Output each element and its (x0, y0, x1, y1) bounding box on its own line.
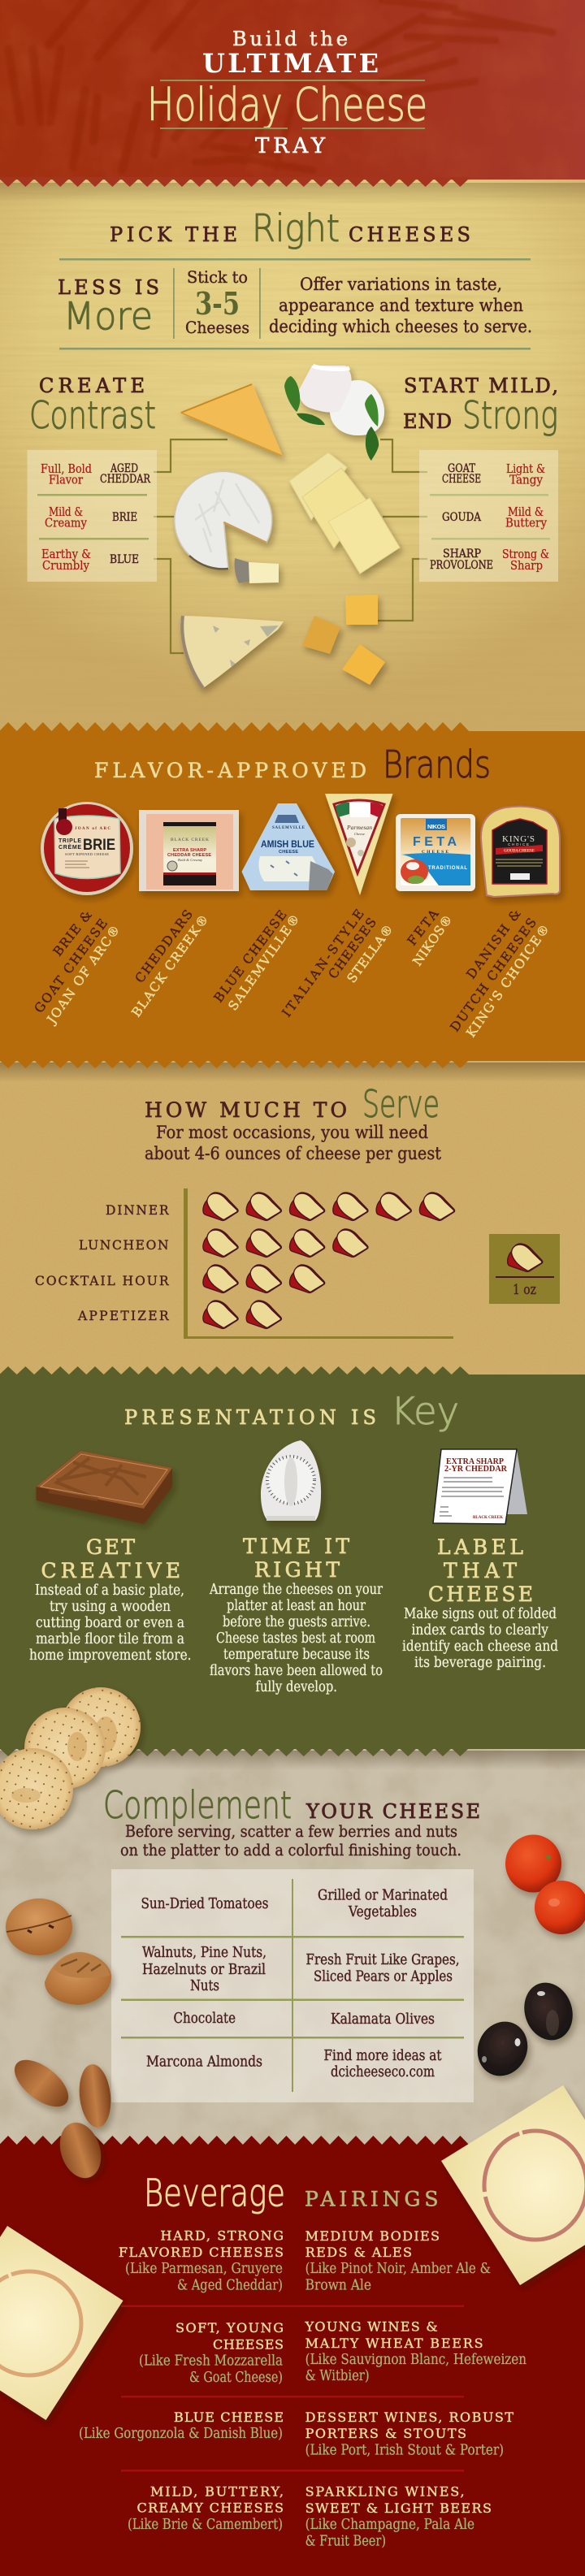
complement table: Sun-Dried Tomatoes (141, 1896, 269, 1912)
product: salemville amish blue (242, 803, 335, 890)
serving advice (145, 1123, 442, 1163)
product: king's choice gouda: KING'S (502, 834, 535, 844)
icon: folded label card: BLACK CREEK (473, 1516, 503, 1520)
tip: time it right: fully develop. (255, 1679, 337, 1695)
heading: FLAVOR-APPROVED (94, 759, 366, 782)
panel: contrast table: BRIE (112, 511, 137, 524)
product: joan of arc brie: SOFT RIPENED CHEESE (65, 852, 109, 856)
icon: folded label card: EXTRA SHARP (446, 1457, 504, 1466)
start mild end strong heading: END (403, 410, 452, 433)
label: cheddars, black creek: CHEDDARS (132, 907, 196, 985)
pairing row 4: (Like Brie & Camembert) (128, 2517, 283, 2533)
label: brie and goat cheese, joan of arc: GOAT CHEESE (32, 916, 110, 1015)
heading (94, 742, 491, 786)
pairing row 3: (Like Gorgonzola & Danish Blue) (79, 2426, 283, 2442)
product: joan of arc brie: BRIE (83, 837, 115, 854)
illustration: aged cheddar wedge (181, 384, 282, 456)
tip: label that cheese: Make signs out of folded (404, 1606, 557, 1622)
product: stella parmesan: Parmesan (346, 824, 372, 831)
label: italian-style cheeses, stella: CHEESES (326, 916, 379, 981)
panel: contrast table: AGED (110, 462, 138, 475)
tip: label that cheese: its beverage pairing. (414, 1655, 546, 1671)
tip: get creative: Instead of a basic plate, (35, 1582, 184, 1599)
complement table: Nuts (190, 1978, 219, 1994)
product: salemville amish blue: AMISH BLUE (261, 838, 314, 850)
title: Holiday Cheese (147, 79, 427, 132)
pairing row 3: (Like Port, Irish Stout & Porter) (306, 2442, 504, 2458)
icon: kitchen timer (261, 1440, 321, 1521)
heading: Brands (383, 742, 491, 786)
tip: time it right: platter at least an hour (227, 1598, 366, 1614)
complement advice: on the platter to add a colorful finishing touch. (120, 1840, 462, 1859)
panel: flavor-approved brands (32, 742, 560, 1040)
tip: time it right: Cheese tastes best at room (216, 1630, 375, 1647)
panel: contrast table: Crumbly (42, 560, 90, 573)
panel: mild to strong table: Sharp (510, 560, 543, 573)
heading: PAIRINGS (305, 2187, 439, 2211)
pictogram chart (35, 1188, 455, 1339)
pairing row 2: YOUNG WINES & (305, 2318, 438, 2335)
label: italian-style cheeses, stella: ITALIAN-STYLE (280, 907, 367, 1020)
row: dinner (106, 1193, 455, 1220)
pairing row 1 (119, 2227, 491, 2294)
pairing row 1: REDS & ALES (306, 2245, 412, 2260)
legend: 1 oz (489, 1234, 560, 1304)
pairing row 1: FLAVORED CHEESES (119, 2245, 284, 2260)
product: nikos feta: CHEESE (422, 850, 448, 855)
complement table: Fresh Fruit Like Grapes, (306, 1952, 460, 1968)
complement table: Sliced Pears or Apples (314, 1969, 453, 1985)
heading: YOUR CHEESE (306, 1800, 480, 1823)
label: danish and dutch cheeses, king's choice: DANISH & (464, 907, 524, 981)
pairing row 3 (79, 2409, 514, 2458)
tip: get creative: GET (86, 1535, 135, 1559)
heading (110, 206, 470, 250)
tip: time it right: temperature because its (223, 1647, 370, 1663)
product: black creek cheddar: Bold & Creamy (178, 858, 202, 862)
pairing row 4: & Fruit Beer) (306, 2533, 386, 2549)
row: dinner: DINNER (106, 1203, 170, 1218)
complement table: dcicheeseco.com (331, 2064, 435, 2080)
complement table (111, 1869, 474, 2102)
illustration: gouda slices (289, 452, 400, 574)
title: Build the (232, 28, 348, 50)
tip: label that cheese: CHEESE (428, 1582, 533, 1606)
product: nikos feta: TRADITIONAL (428, 866, 467, 871)
row: appetizer: APPETIZER (77, 1309, 170, 1323)
product: stella parmesan: Cheese (354, 832, 365, 836)
tip: time it right: flavors have been allowed to (210, 1663, 383, 1679)
heading: PICK THE (110, 223, 237, 246)
row: cocktail hour (35, 1265, 325, 1292)
heading: Complement (103, 1783, 292, 1827)
heading: HOW MUCH TO (145, 1098, 347, 1122)
label: blue cheese, salemville: SALEMVILLE® (226, 911, 303, 1013)
panel: mild to strong table: PROVOLONE (430, 559, 493, 572)
create contrast heading (29, 374, 156, 437)
product: black creek cheddar: CHEDDAR CHEESE (167, 853, 211, 858)
tip: time it right: Arrange the cheeses on your (209, 1582, 384, 1598)
start mild end strong heading: START MILD, (404, 374, 558, 397)
title: TRAY (255, 134, 326, 158)
product: king's choice gouda (481, 807, 560, 897)
row: appetizer (77, 1301, 281, 1328)
pairing row 2: SOFT, YOUNG (176, 2320, 284, 2336)
panel: mild to strong table: Mild & (508, 506, 544, 519)
label: blue cheese, salemville: BLUE CHEESE (211, 907, 290, 1005)
less is more: LESS IS (58, 276, 159, 299)
pairing row 2: & Witbier) (306, 2368, 370, 2384)
serving advice: For most occasions, you will need (156, 1123, 428, 1142)
heading (124, 1389, 459, 1433)
panel: pick the right cheeses (28, 206, 558, 688)
pairing row 1: Brown Ale (306, 2278, 371, 2294)
pairing row 2: & Goat Cheese) (189, 2370, 283, 2386)
tip: label that cheese: LABEL (437, 1535, 523, 1559)
heading (144, 2171, 439, 2214)
pairing row 2: (Like Fresh Mozzarella (139, 2353, 283, 2369)
create contrast heading: Contrast (29, 393, 156, 437)
almond on border (53, 2117, 108, 2184)
create contrast heading: CREATE (39, 374, 145, 397)
tip: label that cheese: THAT (444, 1559, 517, 1582)
complement advice: Before serving, scatter a few berries and nuts (125, 1821, 457, 1841)
heading: Serve (362, 1082, 440, 1126)
panel: presentation is key (29, 1389, 558, 1695)
napkin with wine ring, right (441, 2085, 585, 2285)
heading: Key (391, 1389, 459, 1433)
illustration: olives (469, 1976, 580, 2084)
complement table: Chocolate (174, 2011, 236, 2027)
product: king's choice gouda: CHOICE (508, 842, 529, 846)
label: feta, nikos: FETA (405, 907, 442, 948)
product: joan of arc brie: JOAN of ARC (75, 827, 110, 831)
panel: contrast table: Full, Bold (41, 463, 92, 476)
pairing row 3: BLUE CHEESE (174, 2409, 284, 2425)
connector lines (154, 439, 427, 653)
icon: cutting board (36, 1451, 172, 1524)
panel: mild to strong table: SHARP (443, 548, 481, 561)
panel: mild to strong table: CHEESE (442, 473, 481, 486)
stick to 3-5 cheeses (185, 267, 249, 337)
product: joan of arc brie: TRIPLE (58, 838, 81, 844)
tip: get creative (29, 1535, 192, 1664)
icon: folded label card: 2-YR CHEDDAR (444, 1465, 508, 1474)
product: king's choice gouda: GOUDA CHEESE (504, 850, 535, 853)
pairing row 3: PORTERS & STOUTS (306, 2426, 466, 2441)
illustration: crackers (0, 1687, 141, 1829)
pine frond background (8, 0, 552, 171)
start mild end strong heading: Strong (462, 393, 558, 437)
panel: complement your cheese (0, 1783, 585, 2549)
variation advice (269, 275, 532, 336)
less is more: More (63, 294, 153, 338)
panel: mild to strong table (419, 450, 558, 582)
title: ULTIMATE (202, 48, 379, 79)
illustration: brie wheel (175, 471, 279, 583)
tip: get creative: home improvement store. (29, 1647, 192, 1664)
label: brie and goat cheese, joan of arc: JOAN OF ARC® (43, 923, 123, 1028)
legend: 1 oz: 1 oz (513, 1282, 536, 1298)
tip: time it right: TIME IT (243, 1535, 349, 1558)
heading (103, 1783, 480, 1827)
napkin with beer ring, left (0, 2226, 124, 2420)
pairing row 2 (139, 2318, 526, 2386)
panel: header (8, 0, 552, 171)
tip: label that cheese (402, 1535, 558, 1671)
pairing row 2: CHEESES (213, 2336, 284, 2353)
pairing row 2: MALTY WHEAT BEERS (306, 2336, 483, 2351)
label: danish and dutch cheeses, king's choice: KING'S CHOICE® (464, 922, 552, 1040)
panel: mild to strong table: Strong & (502, 548, 549, 561)
panel: contrast table: Mild & (49, 506, 83, 519)
stick to 3-5 cheeses: Cheeses (185, 318, 249, 337)
product: nikos feta (396, 814, 475, 891)
label: italian-style cheeses, stella: STELLA® (344, 922, 396, 985)
tip: get creative: CREATIVE (41, 1559, 180, 1582)
product: nikos feta: FETA (413, 835, 457, 849)
tip: time it right: before the guests arrive. (223, 1614, 370, 1630)
product: black creek cheddar (139, 810, 239, 891)
row: luncheon: LUNCHEON (79, 1238, 169, 1253)
tip: get creative: cutting board or even a (36, 1615, 184, 1631)
panel: contrast table: BLUE (110, 553, 139, 566)
panel: how much to serve (35, 1082, 560, 1339)
complement table: Find more ideas at (323, 2048, 442, 2064)
product: black creek cheddar: EXTRA SHARP (173, 848, 206, 853)
panel: contrast table: Flavor (49, 474, 83, 487)
row: luncheon (79, 1229, 368, 1257)
complement table: Grilled or Marinated (318, 1888, 448, 1904)
panel: mild to strong table: GOUDA (442, 511, 482, 524)
illustration: walnuts (6, 1898, 111, 2005)
complement table: Marcona Almonds (146, 2054, 262, 2070)
label: feta, nikos: NIKOS® (410, 912, 456, 968)
pairing row 2: (Like Sauvignon Blanc, Hefeweizen (306, 2352, 526, 2368)
complement table: Hazelnuts or Brazil (142, 1962, 266, 1978)
heading: Right (252, 206, 340, 250)
panel: mild to strong table: Tangy (509, 474, 544, 487)
label: danish and dutch cheeses, king's choice: DUTCH CHEESES (448, 916, 540, 1034)
illustration: provolone cubes (302, 595, 385, 685)
panel: contrast table: CHEDDAR (100, 473, 150, 486)
start mild end strong heading (403, 374, 558, 437)
illustration: goat cheese with basil (284, 366, 384, 461)
title (147, 28, 427, 158)
label: cheddars, black creek: BLACK CREEK® (129, 912, 211, 1020)
panel: mild to strong table: Light & (506, 463, 545, 476)
pairing row 4 (128, 2484, 492, 2549)
illustration: tomatoes (505, 1834, 585, 1934)
variation advice: appearance and texture when (279, 296, 523, 315)
stick to 3-5 cheeses: Stick to (187, 267, 248, 287)
product: joan of arc brie: CRÈME (58, 843, 81, 851)
tip: time it right: RIGHT (254, 1558, 340, 1582)
tip: label that cheese: index cards to clearly (411, 1622, 548, 1639)
panel: contrast table: Earthy & (41, 548, 91, 561)
less is more (58, 276, 159, 338)
pairing row 4: MILD, BUTTERY, (150, 2484, 284, 2499)
heading: PRESENTATION IS (124, 1406, 376, 1429)
pairing row 1: (Like Pinot Noir, Amber Ale & (306, 2261, 491, 2277)
complement table: Kalamata Olives (331, 2011, 435, 2028)
serving advice: about 4-6 ounces of cheese per guest (145, 1144, 442, 1163)
heading: Beverage (144, 2171, 285, 2214)
tip: time it right (209, 1535, 384, 1695)
pairing row 1: HARD, STRONG (161, 2227, 284, 2244)
pairing row 4: (Like Champagne, Pala Ale (306, 2517, 474, 2533)
panel: mild to strong table: Buttery (505, 517, 548, 530)
complement table: Vegetables (348, 1904, 417, 1920)
product: stella parmesan (325, 794, 393, 895)
rotated brand labels (32, 907, 552, 1040)
panel: contrast table (28, 450, 157, 582)
variation advice: deciding which cheeses to serve. (269, 317, 532, 336)
pairing row 4: SPARKLING WINES, (306, 2484, 465, 2499)
heading: CHEESES (349, 223, 470, 246)
panel: contrast table: Creamy (45, 517, 88, 530)
stick to 3-5 cheeses: 3-5 (195, 285, 240, 322)
pairing row 1: MEDIUM BODIES (306, 2228, 440, 2244)
illustration: blue cheese wedge (180, 616, 284, 688)
variation advice: Offer variations in taste, (300, 275, 502, 294)
pairing row 1: (Like Parmesan, Gruyere (125, 2261, 283, 2277)
heading (145, 1082, 440, 1126)
tip: label that cheese: identify each cheese and (402, 1639, 558, 1655)
product: nikos feta: NIKOS (427, 823, 445, 830)
panel: mild to strong table: GOAT (448, 462, 476, 475)
panel: beverage pairings (0, 2085, 585, 2549)
pairing row 4: CREAMY CHEESES (136, 2500, 284, 2515)
complement table: Walnuts, Pine Nuts, (142, 1945, 266, 1961)
product: salemville amish blue: SALEMVILLE (272, 826, 306, 830)
label: brie and goat cheese, joan of arc: BRIE & (50, 907, 95, 959)
complement advice (120, 1821, 462, 1859)
icon: folded label card (433, 1449, 527, 1524)
product: joan of arc brie (41, 802, 133, 895)
tip: get creative: marble floor tile from a (36, 1631, 184, 1647)
row: cocktail hour: COCKTAIL HOUR (35, 1274, 170, 1288)
illustration: almonds (6, 2051, 114, 2129)
product: salemville amish blue: CHEESE (279, 850, 298, 855)
product: black creek cheddar: BLACK CREEK (171, 838, 209, 842)
pairing row 3: DESSERT WINES, ROBUST (306, 2409, 514, 2425)
tip: get creative: try using a wooden (50, 1599, 171, 1615)
pairing row 4: SWEET & LIGHT BEERS (306, 2500, 492, 2516)
pairing row 1: & Aged Cheddar) (177, 2278, 283, 2294)
